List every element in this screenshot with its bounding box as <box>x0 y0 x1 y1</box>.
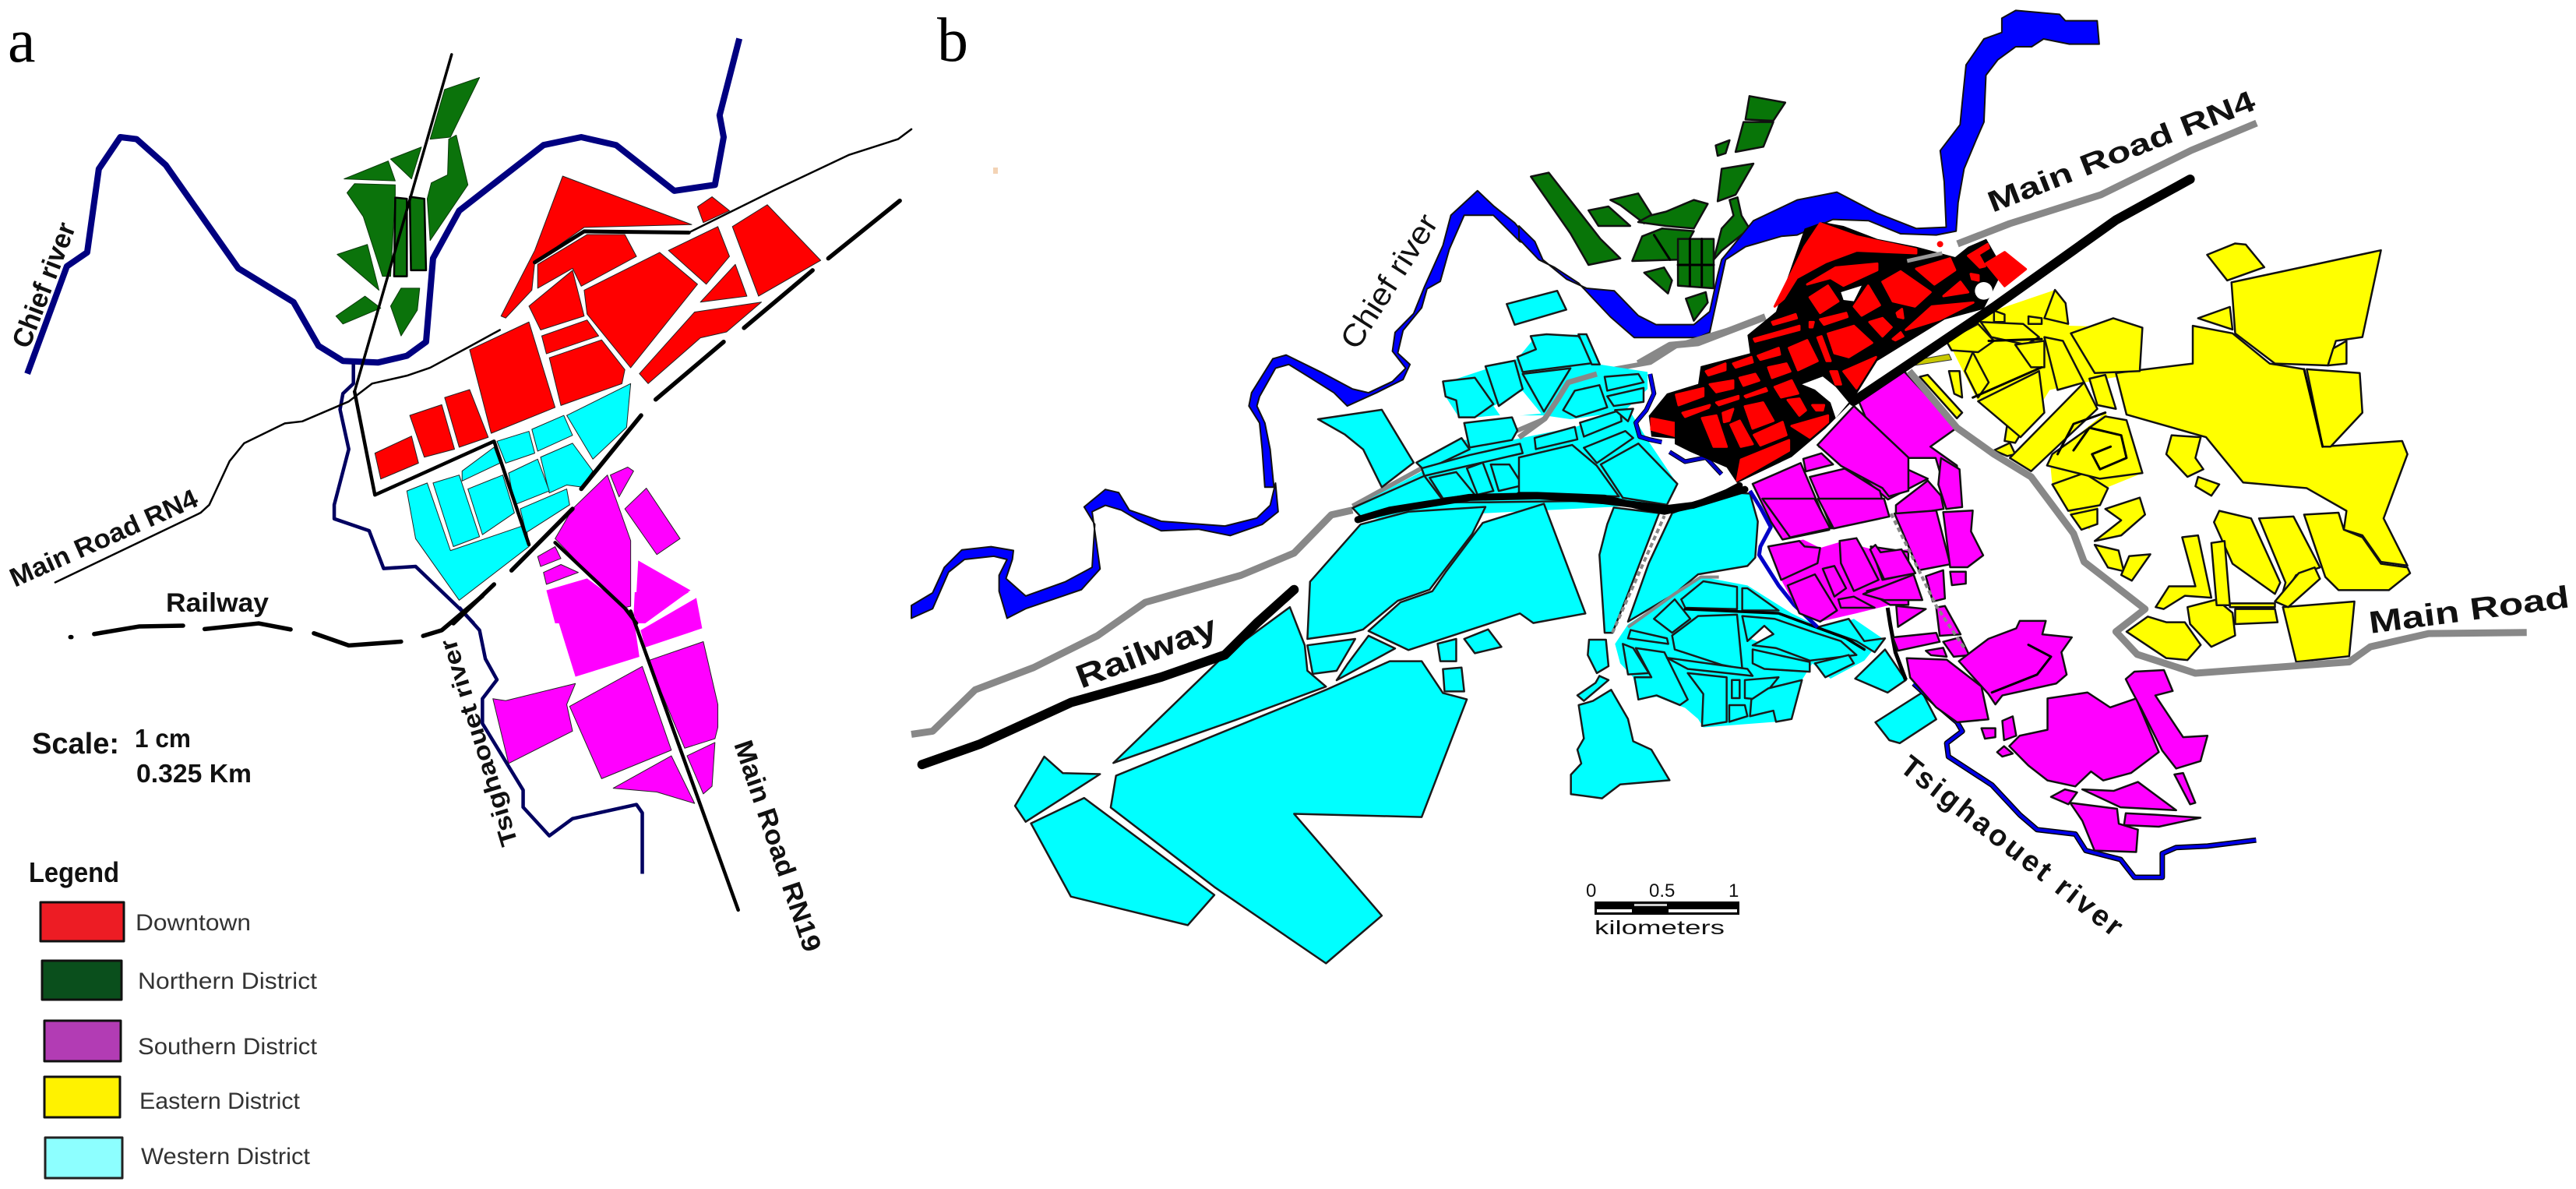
Chief river, panel a <box>27 38 739 374</box>
legend: Downtown <box>41 902 251 941</box>
Tsighaouet river, panel a <box>334 364 643 873</box>
legend: Legend <box>29 856 119 888</box>
label: Main Road RN4: Main Road RN4 <box>5 484 203 593</box>
legend: Southern District: Southern District <box>138 1034 318 1060</box>
Northern District blocks, panel b <box>1531 96 1785 321</box>
legend: Northern District: Northern District <box>138 968 318 994</box>
scale note: Scale: <box>32 728 119 760</box>
Railway black line, panel b <box>922 179 2190 764</box>
legend: Southern District <box>44 1021 318 1061</box>
South-east Main Road gray line, panel b <box>1909 371 2527 673</box>
panel letter b: b <box>937 6 968 75</box>
Western District blocks, panel a <box>407 383 631 600</box>
scale bar: kilometers <box>1595 917 1725 939</box>
Southern District blocks, panel a <box>493 467 718 803</box>
label: Chief river: Chief river <box>6 218 82 352</box>
label: Tsighaouet river: Tsighaouet river <box>1894 750 2129 944</box>
legend: Western District <box>45 1138 311 1178</box>
panel a: district map with legend <box>5 7 911 1178</box>
Main Road RN4 gray line, panel b <box>911 123 2257 734</box>
Chief river, panel b <box>911 10 2099 618</box>
Main Road RN4 line, panel a <box>55 129 911 582</box>
scale bar: 0.5 <box>1649 880 1675 901</box>
panel b: detailed district map <box>911 6 2571 963</box>
label: Railway: Railway <box>166 588 269 618</box>
scale note: 1 cm <box>135 724 191 753</box>
label: Main Road RN19: Main Road RN19 <box>728 736 826 956</box>
Downtown blocks, panel b <box>1649 222 2026 483</box>
label: Main Road RN4: Main Road RN4 <box>1983 85 2260 219</box>
legend: Downtown: Downtown <box>136 910 251 936</box>
scale bar: 0 <box>1586 880 1596 901</box>
label: Railway: Railway <box>1070 608 1222 695</box>
Northern District blocks, panel a <box>336 77 480 336</box>
legend: Eastern District <box>44 1077 301 1117</box>
panel letter a: a <box>8 7 36 76</box>
legend: Western District: Western District <box>141 1144 311 1170</box>
label: Tsighaouet river: Tsighaouet river <box>435 636 523 849</box>
Southern District blocks, panel b <box>1753 371 2208 852</box>
stray peach mark <box>993 168 998 174</box>
Eastern District blocks, panel b <box>1915 243 2410 662</box>
label: Chief river: Chief river <box>1334 208 1445 355</box>
scale bar: 1 <box>1728 880 1739 901</box>
Downtown blocks, panel a <box>375 176 821 479</box>
Western District blocks, panel b <box>1015 291 1936 963</box>
legend <box>29 856 318 1178</box>
Railway dashed line, panel a <box>70 201 900 645</box>
scale bar <box>1586 880 1739 939</box>
scale note: 0.325 Km <box>136 759 252 788</box>
Tsighaouet river, panel b <box>1636 374 2256 877</box>
legend: Northern District <box>42 961 318 1000</box>
label: Main Road: Main Road <box>2366 580 2571 640</box>
scale note <box>32 724 252 788</box>
legend: Eastern District: Eastern District <box>139 1088 301 1114</box>
Main Road RN19 line, panel a <box>354 55 738 910</box>
